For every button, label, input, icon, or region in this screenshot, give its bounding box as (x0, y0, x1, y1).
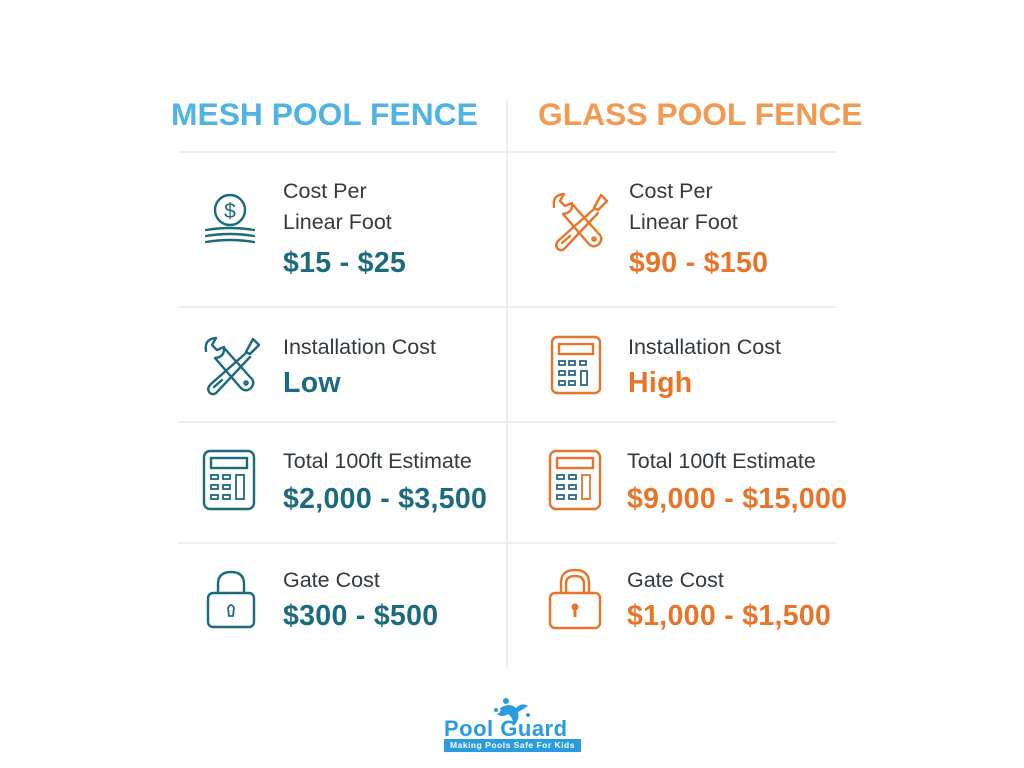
label (283, 179, 392, 234)
label: Cost Per (283, 179, 367, 203)
value: Low (283, 367, 341, 399)
value: $9,000 - $15,000 (627, 483, 847, 515)
label (629, 179, 738, 234)
panel: glass installation cost (550, 335, 781, 399)
tagline: Making Pools Safe For Kids (450, 740, 575, 750)
panel: mesh cost per linear foot (205, 179, 406, 279)
icon: lock (206, 570, 256, 628)
value: $15 - $25 (283, 247, 406, 279)
panel: glass total estimate (548, 449, 847, 515)
label: Gate Cost (283, 568, 380, 592)
title: glass pool fence: GLASS POOL FENCE (538, 96, 862, 132)
panel: mesh total estimate (202, 449, 487, 515)
value: $300 - $500 (283, 600, 438, 632)
icon: coin stack: $ (224, 200, 236, 223)
icon: tools (552, 192, 608, 252)
logo text: Pool Guard (444, 716, 568, 741)
value: High (628, 367, 693, 399)
panel: glass gate cost (548, 568, 831, 632)
icon: calculator (550, 336, 602, 394)
value: $2,000 - $3,500 (283, 483, 487, 515)
panel: glass cost per linear foot (552, 179, 768, 279)
icon: splash (494, 698, 530, 725)
label: Installation Cost (628, 335, 781, 359)
icon: coin stack (205, 194, 256, 244)
label: Linear Foot (283, 210, 392, 234)
value: $90 - $150 (629, 247, 768, 279)
panel: mesh gate cost (206, 568, 438, 632)
panel: mesh installation cost (204, 335, 436, 399)
icon: tools (204, 336, 260, 396)
label: Linear Foot (629, 210, 738, 234)
logo: pool guard (444, 698, 581, 752)
title: mesh pool fence: MESH POOL FENCE (171, 96, 478, 132)
label: Total 100ft Estimate (283, 449, 472, 473)
value: $1,000 - $1,500 (627, 600, 831, 632)
icon: calculator (548, 450, 602, 510)
icon: calculator (202, 450, 256, 510)
label: Cost Per (629, 179, 713, 203)
label: Installation Cost (283, 335, 436, 359)
label: Total 100ft Estimate (627, 449, 816, 473)
label: Gate Cost (627, 568, 724, 592)
icon: lock (548, 568, 602, 630)
